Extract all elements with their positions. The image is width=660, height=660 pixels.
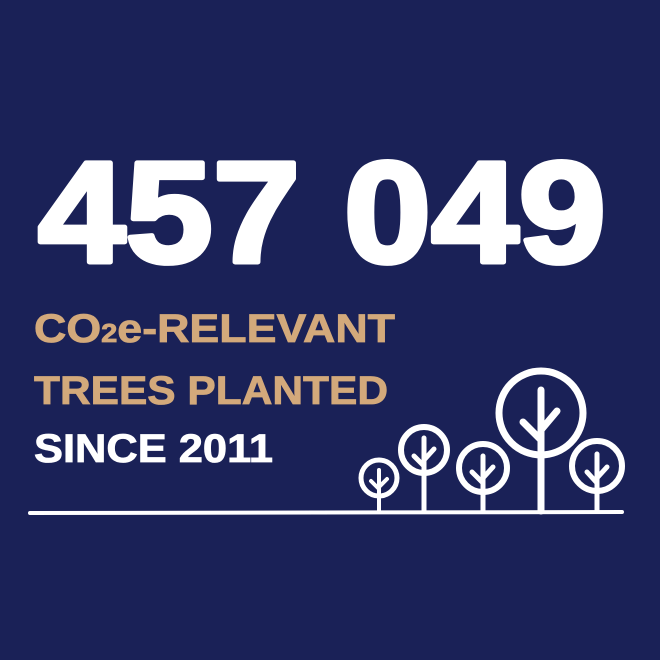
- tree 2: [401, 427, 447, 511]
- text: since 2011: SINCE 2011: [34, 427, 273, 471]
- subtitle: CO2e-relevant trees planted: CO 2e-RELEVANT: [34, 307, 395, 351]
- tree 1: [361, 460, 397, 511]
- tree 5: [572, 441, 622, 511]
- tree 3: [459, 444, 507, 511]
- subtitle: CO2e-relevant trees planted: TREES PLANTED: [34, 369, 388, 413]
- title: big number: 457 049: [38, 132, 606, 293]
- ground line: [30, 512, 622, 513]
- illustration: trees: [30, 371, 622, 513]
- tree 4: [499, 371, 583, 511]
- subtitle: CO2e-relevant trees planted: [34, 307, 395, 413]
